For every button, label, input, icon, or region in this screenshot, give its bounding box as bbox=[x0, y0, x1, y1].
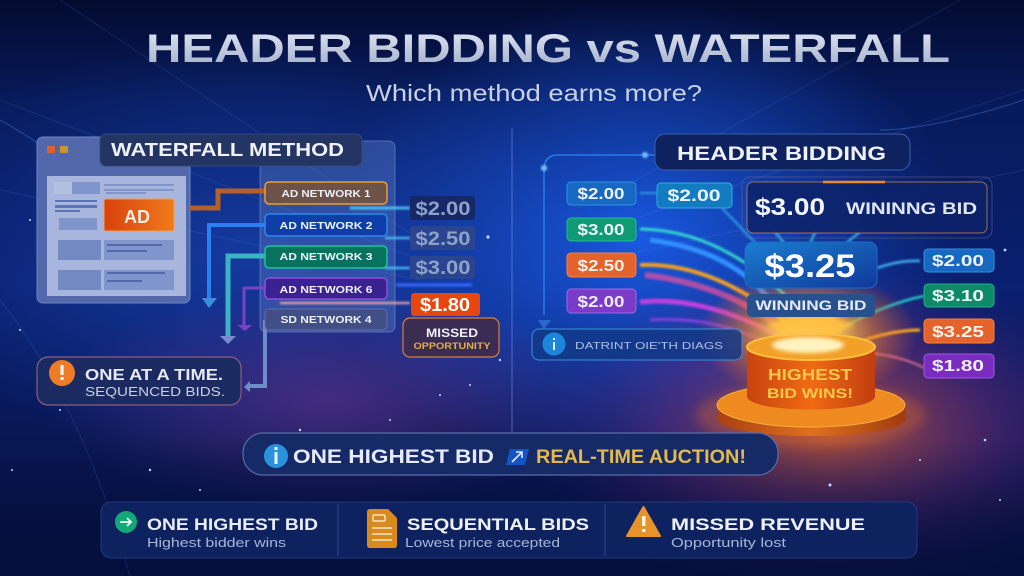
ad network 1 bbox=[265, 182, 387, 204]
price: $1.80 bbox=[411, 293, 480, 316]
ad network 2: AD NETWORK 2 bbox=[280, 220, 373, 232]
heading: header bidding bbox=[655, 134, 910, 170]
note: one at a time: ONE AT A TIME. bbox=[85, 367, 223, 384]
bid chip right: $1.80 bbox=[924, 354, 994, 378]
item: sequential bids: Lowest price accepted bbox=[405, 535, 560, 550]
icon: info bbox=[264, 444, 288, 468]
winning bid box: WININNG BID bbox=[846, 199, 977, 218]
podium bbox=[696, 334, 926, 447]
bid chip right: $1.80: $1.80 bbox=[932, 358, 984, 375]
ad network 1: AD NETWORK 1 bbox=[282, 188, 371, 200]
bid chip right: $2.00: $2.00 bbox=[932, 253, 984, 270]
bid chip left: $3.00: $3.00 bbox=[578, 222, 625, 239]
item: sequential bids bbox=[367, 509, 589, 550]
item: missed revenue: MISSED REVENUE bbox=[671, 515, 865, 534]
item: sequential bids: SEQUENTIAL BIDS bbox=[407, 515, 589, 534]
podium: BID WINS! bbox=[767, 385, 853, 401]
bid chip right: $3.10: $3.10 bbox=[932, 288, 984, 305]
arrow: orange connector bbox=[190, 191, 265, 208]
winning bid box: $3.00 bbox=[755, 194, 825, 221]
bid chip left: $2.00 purple bbox=[567, 289, 636, 313]
price: $3.00 bbox=[410, 256, 475, 279]
arrow: grey connector to note bbox=[244, 320, 265, 392]
ad network 6: AD NETWORK 6 bbox=[280, 284, 373, 296]
bid chip: $2.00 second: $2.00 bbox=[668, 186, 720, 205]
center divider bbox=[511, 128, 513, 432]
bid chip right: $3.25 bbox=[924, 319, 994, 343]
bid chip right: $3.10 bbox=[924, 284, 994, 307]
callout: missed opportunity bbox=[403, 318, 499, 357]
price: $2.50 bbox=[410, 226, 475, 250]
panel: waterfall method bbox=[37, 134, 499, 405]
current bid: $3.25 bbox=[745, 242, 877, 288]
price: $1.80: $1.80 bbox=[420, 295, 470, 315]
info pill bbox=[532, 329, 742, 360]
winning bid box bbox=[742, 177, 992, 238]
banner: one highest bid: ONE HIGHEST BID bbox=[293, 447, 494, 468]
banner: one highest bid bbox=[243, 433, 778, 475]
bid chip left: $2.50 bbox=[567, 253, 636, 277]
note: one at a time: SEQUENCED BIDS. bbox=[85, 384, 225, 399]
ad button: AD bbox=[124, 207, 150, 227]
item: one highest bid: ONE HIGHEST BID bbox=[147, 515, 318, 534]
bid chip left: $2.00: $2.00 bbox=[578, 186, 625, 203]
curved bid streams bbox=[640, 193, 924, 368]
bid chip right: $3.25: $3.25 bbox=[932, 324, 984, 341]
glow lines to prices bbox=[280, 208, 472, 303]
label: winning bid bbox=[747, 294, 875, 317]
bid chip left: $2.00 bbox=[567, 182, 636, 205]
title: HEADER BIDDING vs WATERFALL bbox=[146, 27, 950, 71]
ad network 6 bbox=[265, 278, 387, 299]
arrow: teal connector bbox=[220, 256, 265, 344]
ad network 3: AD NETWORK 3 bbox=[280, 251, 373, 263]
label: winning bid: WINNING BID bbox=[756, 297, 866, 313]
burst glow bbox=[698, 270, 918, 400]
note: one at a time bbox=[37, 357, 241, 405]
heading: header bidding: HEADER BIDDING bbox=[677, 144, 886, 165]
item: one highest bid: Highest bidder wins bbox=[147, 535, 287, 550]
heading: waterfall method bbox=[100, 134, 362, 166]
banner: one highest bid: REAL-TIME AUCTION! bbox=[536, 447, 746, 468]
arrow: purple connector bbox=[237, 288, 265, 331]
icon: arrow bbox=[506, 449, 529, 465]
current bid: $3.25: $3.25 bbox=[764, 248, 856, 284]
bid chip: $2.00 second bbox=[657, 183, 732, 208]
callout: missed opportunity: OPPORTUNITY bbox=[414, 341, 491, 352]
sd network 4: SD NETWORK 4 bbox=[280, 314, 372, 326]
browser back panel bbox=[260, 141, 395, 332]
ad network 2 bbox=[265, 214, 387, 236]
item: one highest bid bbox=[115, 511, 318, 550]
frame line bbox=[538, 152, 655, 329]
bid chip left: $2.50: $2.50 bbox=[578, 258, 625, 275]
panel: header bidding bbox=[532, 134, 994, 447]
panel: summary strip bbox=[101, 502, 917, 558]
sd network 4 bbox=[265, 309, 387, 330]
bid chip left: $3.00 bbox=[567, 218, 636, 241]
callout: missed opportunity: MISSED bbox=[426, 328, 478, 340]
item: missed revenue bbox=[627, 507, 865, 550]
ad network 3 bbox=[265, 246, 387, 268]
info pill: DATRINT OIE'TH DIAGS bbox=[575, 340, 723, 352]
bid chip left: $2.00 purple: $2.00 bbox=[578, 294, 625, 311]
podium: HIGHEST bbox=[768, 367, 852, 384]
browser window bbox=[37, 137, 190, 303]
bid chip right: $2.00 bbox=[924, 249, 994, 272]
price: $2.00 bbox=[410, 196, 475, 220]
price: $2.50: $2.50 bbox=[416, 229, 470, 250]
heading: waterfall method: WATERFALL METHOD bbox=[111, 140, 344, 160]
price: $2.00: $2.00 bbox=[416, 199, 470, 220]
subtitle: Which method earns more? bbox=[366, 80, 702, 106]
arrow: blue connector bbox=[202, 225, 265, 308]
ad button bbox=[104, 199, 174, 231]
item: missed revenue: Opportunity lost bbox=[671, 535, 786, 550]
price: $3.00: $3.00 bbox=[416, 258, 470, 279]
